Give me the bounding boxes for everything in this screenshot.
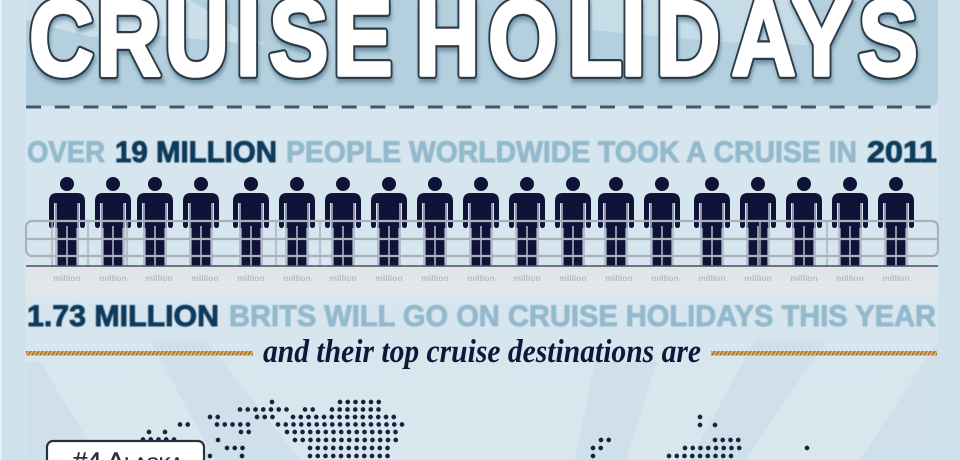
million labels: million xyxy=(191,273,219,283)
million labels: million xyxy=(145,273,173,283)
million labels: million xyxy=(698,273,726,283)
panel: title banner xyxy=(26,0,938,106)
subheading: and their top cruise destinations are xyxy=(263,334,701,370)
left edge highlight xyxy=(0,0,2,460)
people row xyxy=(49,177,914,266)
headline: over 19 million: 2011 xyxy=(867,136,937,169)
deck line xyxy=(26,265,938,267)
million labels: million xyxy=(53,273,81,283)
headline: over 19 million: 19 MILLION xyxy=(115,136,277,169)
headline: 1.73 million brits: BRITS WILL GO ON CRUISE HOLIDAYS THIS YEAR xyxy=(229,300,936,333)
million labels: million xyxy=(559,273,587,283)
million labels: million xyxy=(744,273,772,283)
million labels: million xyxy=(421,273,449,283)
headline: over 19 million: OVER xyxy=(27,136,105,169)
million labels: million xyxy=(99,273,127,283)
million labels: million xyxy=(882,273,910,283)
rope divider left xyxy=(26,351,253,356)
headline: 1.73 million brits: 1.73 MILLION xyxy=(27,300,219,333)
rope divider right xyxy=(711,351,937,356)
callout: #4 Alaska xyxy=(47,441,204,460)
headline: over 19 million xyxy=(27,136,937,169)
headline: over 19 million: PEOPLE WORLDWIDE TOOK A CRUISE IN xyxy=(286,136,857,169)
background rays xyxy=(26,340,938,460)
million labels: million xyxy=(513,273,541,283)
million labels: million xyxy=(329,273,357,283)
million labels: million xyxy=(605,273,633,283)
million labels: million xyxy=(237,273,265,283)
million labels: million xyxy=(467,273,495,283)
million labels xyxy=(53,273,910,283)
million labels: million xyxy=(836,273,864,283)
million labels: million xyxy=(283,273,311,283)
million labels: million xyxy=(651,273,679,283)
dashed divider xyxy=(26,106,938,108)
ship railing xyxy=(26,221,938,266)
dotted world map xyxy=(143,402,808,456)
ground band xyxy=(26,267,938,299)
million labels: million xyxy=(790,273,818,283)
million labels: million xyxy=(375,273,403,283)
